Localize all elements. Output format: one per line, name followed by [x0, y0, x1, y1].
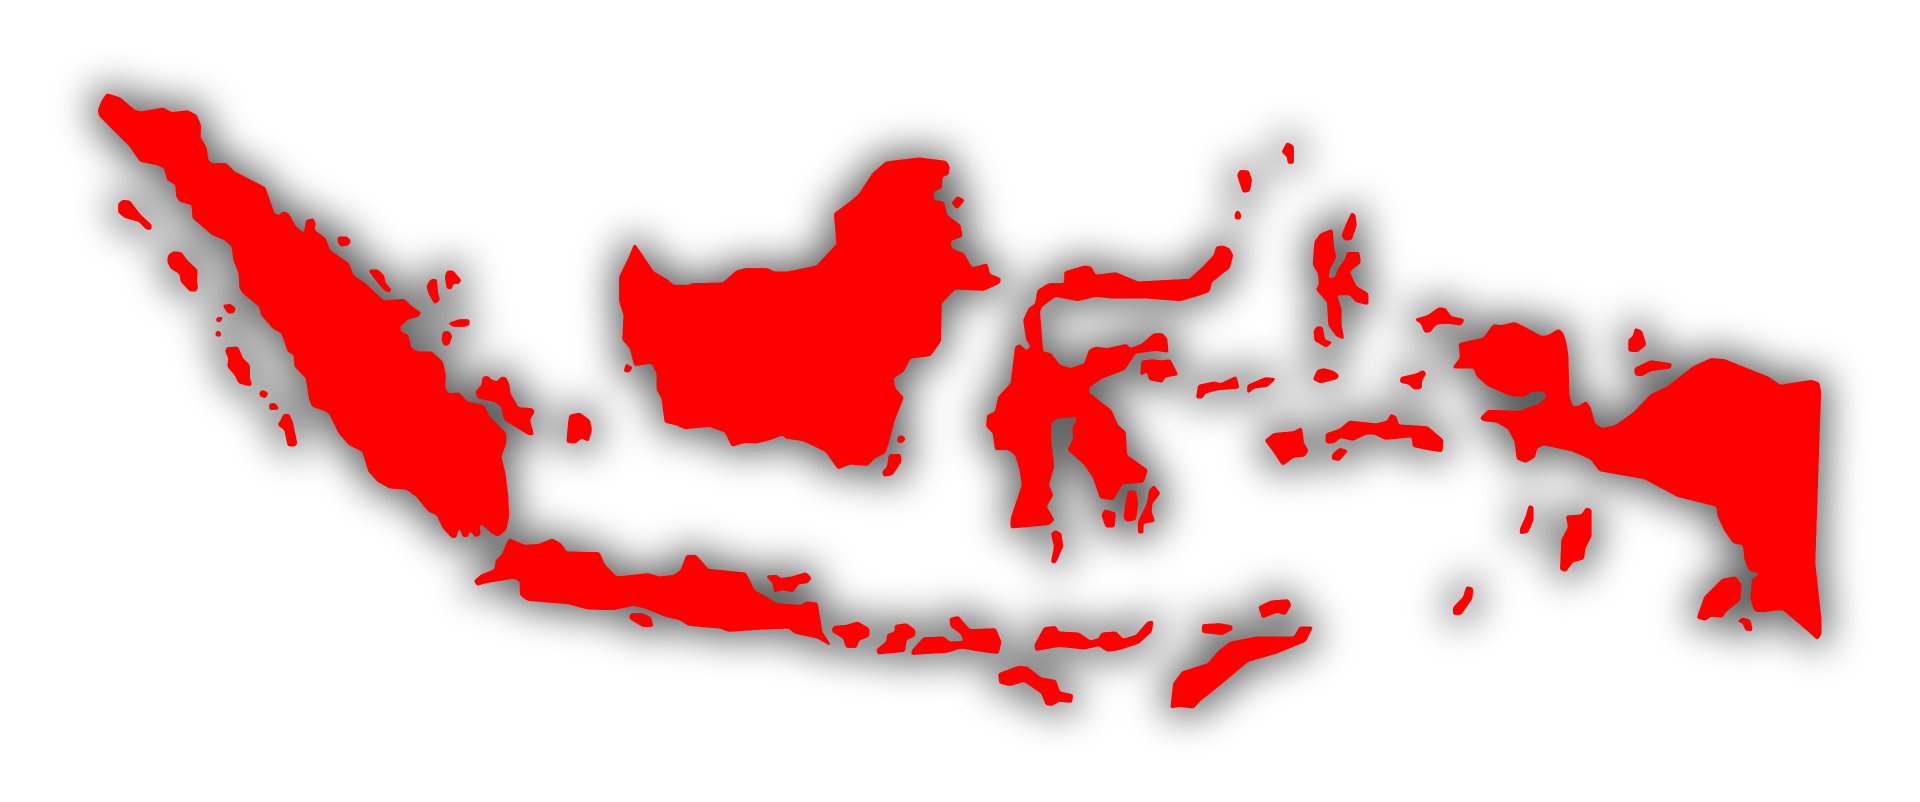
region: Sulawesi and nearby islands	[986, 170, 1276, 563]
region: Papua and nearby islands	[1452, 322, 1821, 640]
region: Maluku islands	[1265, 142, 1591, 615]
region: Java and Lesser Sunda islands	[474, 538, 1313, 708]
region: Sumatra and nearby islands	[98, 93, 592, 538]
region: Kalimantan and nearby islands	[619, 158, 1001, 477]
